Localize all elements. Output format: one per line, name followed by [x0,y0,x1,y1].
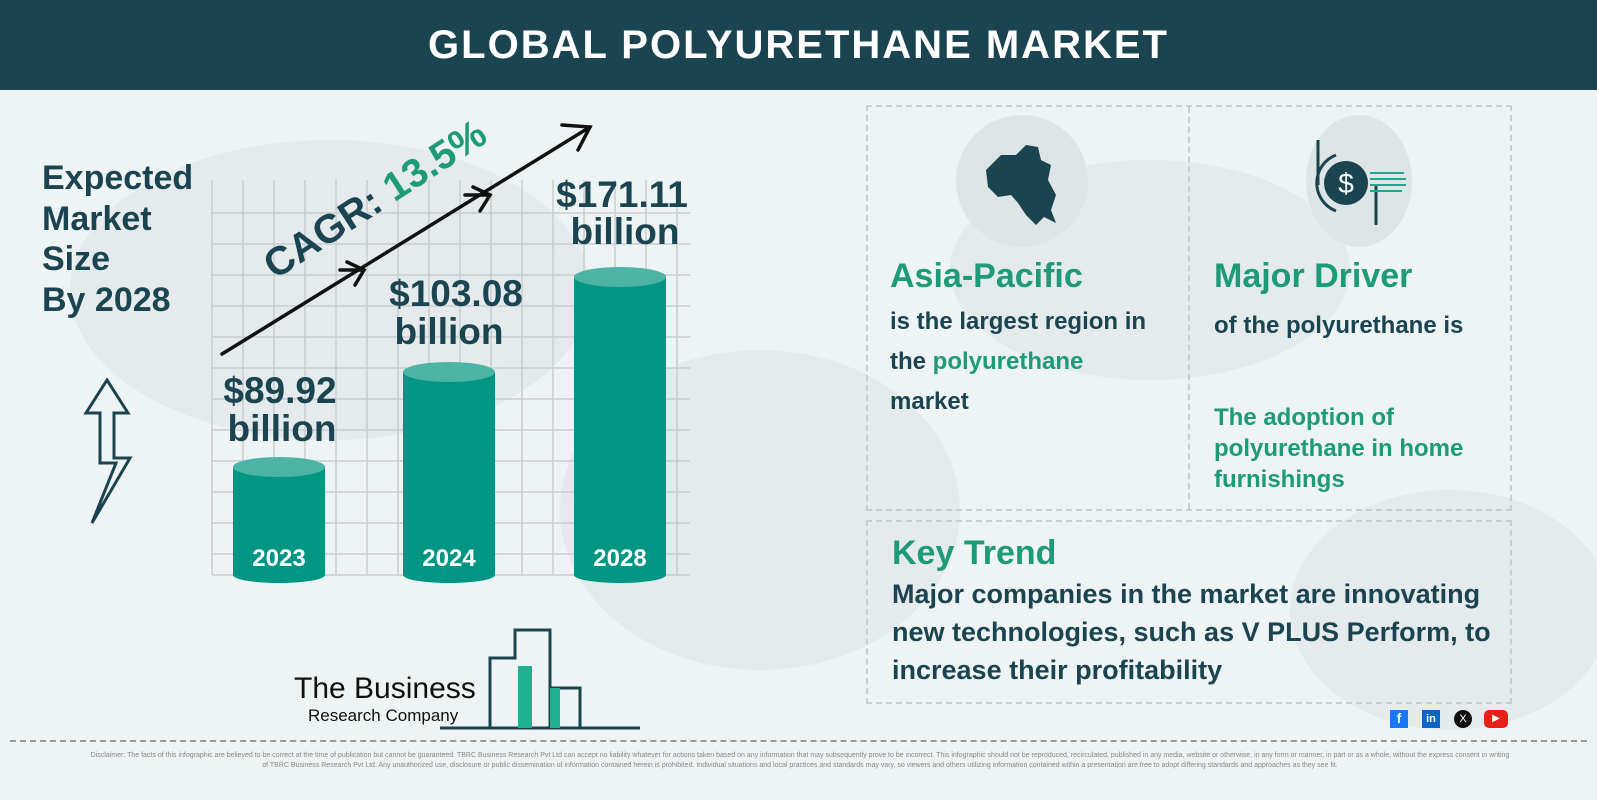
text: major driver [1214,257,1463,493]
expected market size text: Expected [42,159,193,197]
value labels: billion [228,408,336,449]
header [0,0,1597,90]
text: asia-pacific: the polyurethane [890,348,1083,375]
expected market size text: By 2028 [42,280,171,318]
text: asia-pacific [890,257,1146,415]
panel: key trend: Key Trend [892,534,1056,572]
icon: dollar driver [1306,115,1412,247]
text: asia-pacific: Asia-Pacific [890,257,1083,295]
disclaimer: Disclaimer: The facts of this infographic are believed to be correct at the time of publication but cannot be guaranteed. TBRC Business Research Pvt Ltd can accept no liability whatever for actions taken based on any information that may subsequently prove to be incorrect. This infographic should not be reproduced, recirculated, published in any media, website or otherwise, in any form or manner, in part or as a whole, without the express consent in writing of TBRC Business Research Pvt Ltd. Any unauthorized use, disclosure or public dissemination of information contained herein is prohibited. Individual situations and local practices and standards may vary, so viewers and others utilizing information contained within a presentation are free to adopt differing standards and approaches as they see fit. [91,752,1509,769]
value labels: $103.08 [389,273,523,314]
expected market size text [42,159,193,318]
divider [1188,107,1190,509]
bar 2023: 2023 [252,545,306,572]
text: major driver: of the polyurethane is [1214,312,1463,339]
value labels: billion [395,311,503,352]
logo: Research Company [308,706,458,725]
logo [294,628,640,730]
arrow: CAGR trend [222,125,590,354]
social icons: ▶ [1492,713,1500,724]
text: major driver: Major Driver [1214,257,1412,295]
header: GLOBAL POLYURETHANE MARKET [428,23,1169,67]
bar chart [211,111,690,583]
icon: dollar driver: $ [1338,168,1354,199]
bar 2023 [233,457,325,583]
CAGR label: CAGR: 13.5% [256,111,494,288]
text: asia-pacific: market [890,388,969,415]
bar 2028: 2028 [593,545,647,572]
bar 2028 [574,267,666,583]
icon: lightning arrow [83,378,133,524]
social icons [1390,710,1508,728]
social icons: in [1426,713,1436,725]
footer divider [10,740,1587,742]
bar 2024 [403,362,495,583]
expected market size text: Size [42,240,110,278]
panel: region & driver [866,105,1512,511]
panel: key trend [866,520,1512,704]
value labels [223,174,688,449]
text: major driver: The adoption of polyurethane in home furnishings [1214,404,1463,493]
social icons: X [1459,713,1467,725]
panel: key trend: Major companies in the market are innovating [892,579,1480,609]
logo: The Business [294,672,476,705]
bar 2024: 2024 [422,545,476,572]
text: asia-pacific: is the largest region in [890,308,1146,335]
social icons: f [1397,710,1401,726]
value labels: $89.92 [223,370,337,411]
value labels: billion [571,211,679,252]
value labels: $171.11 [556,174,688,215]
panel: key trend: new technologies, such as V PLUS Perform, to [892,617,1491,647]
panel: key trend: increase their profitability [892,655,1222,685]
icon: asia map [956,115,1088,247]
expected market size text: Market [42,200,152,238]
